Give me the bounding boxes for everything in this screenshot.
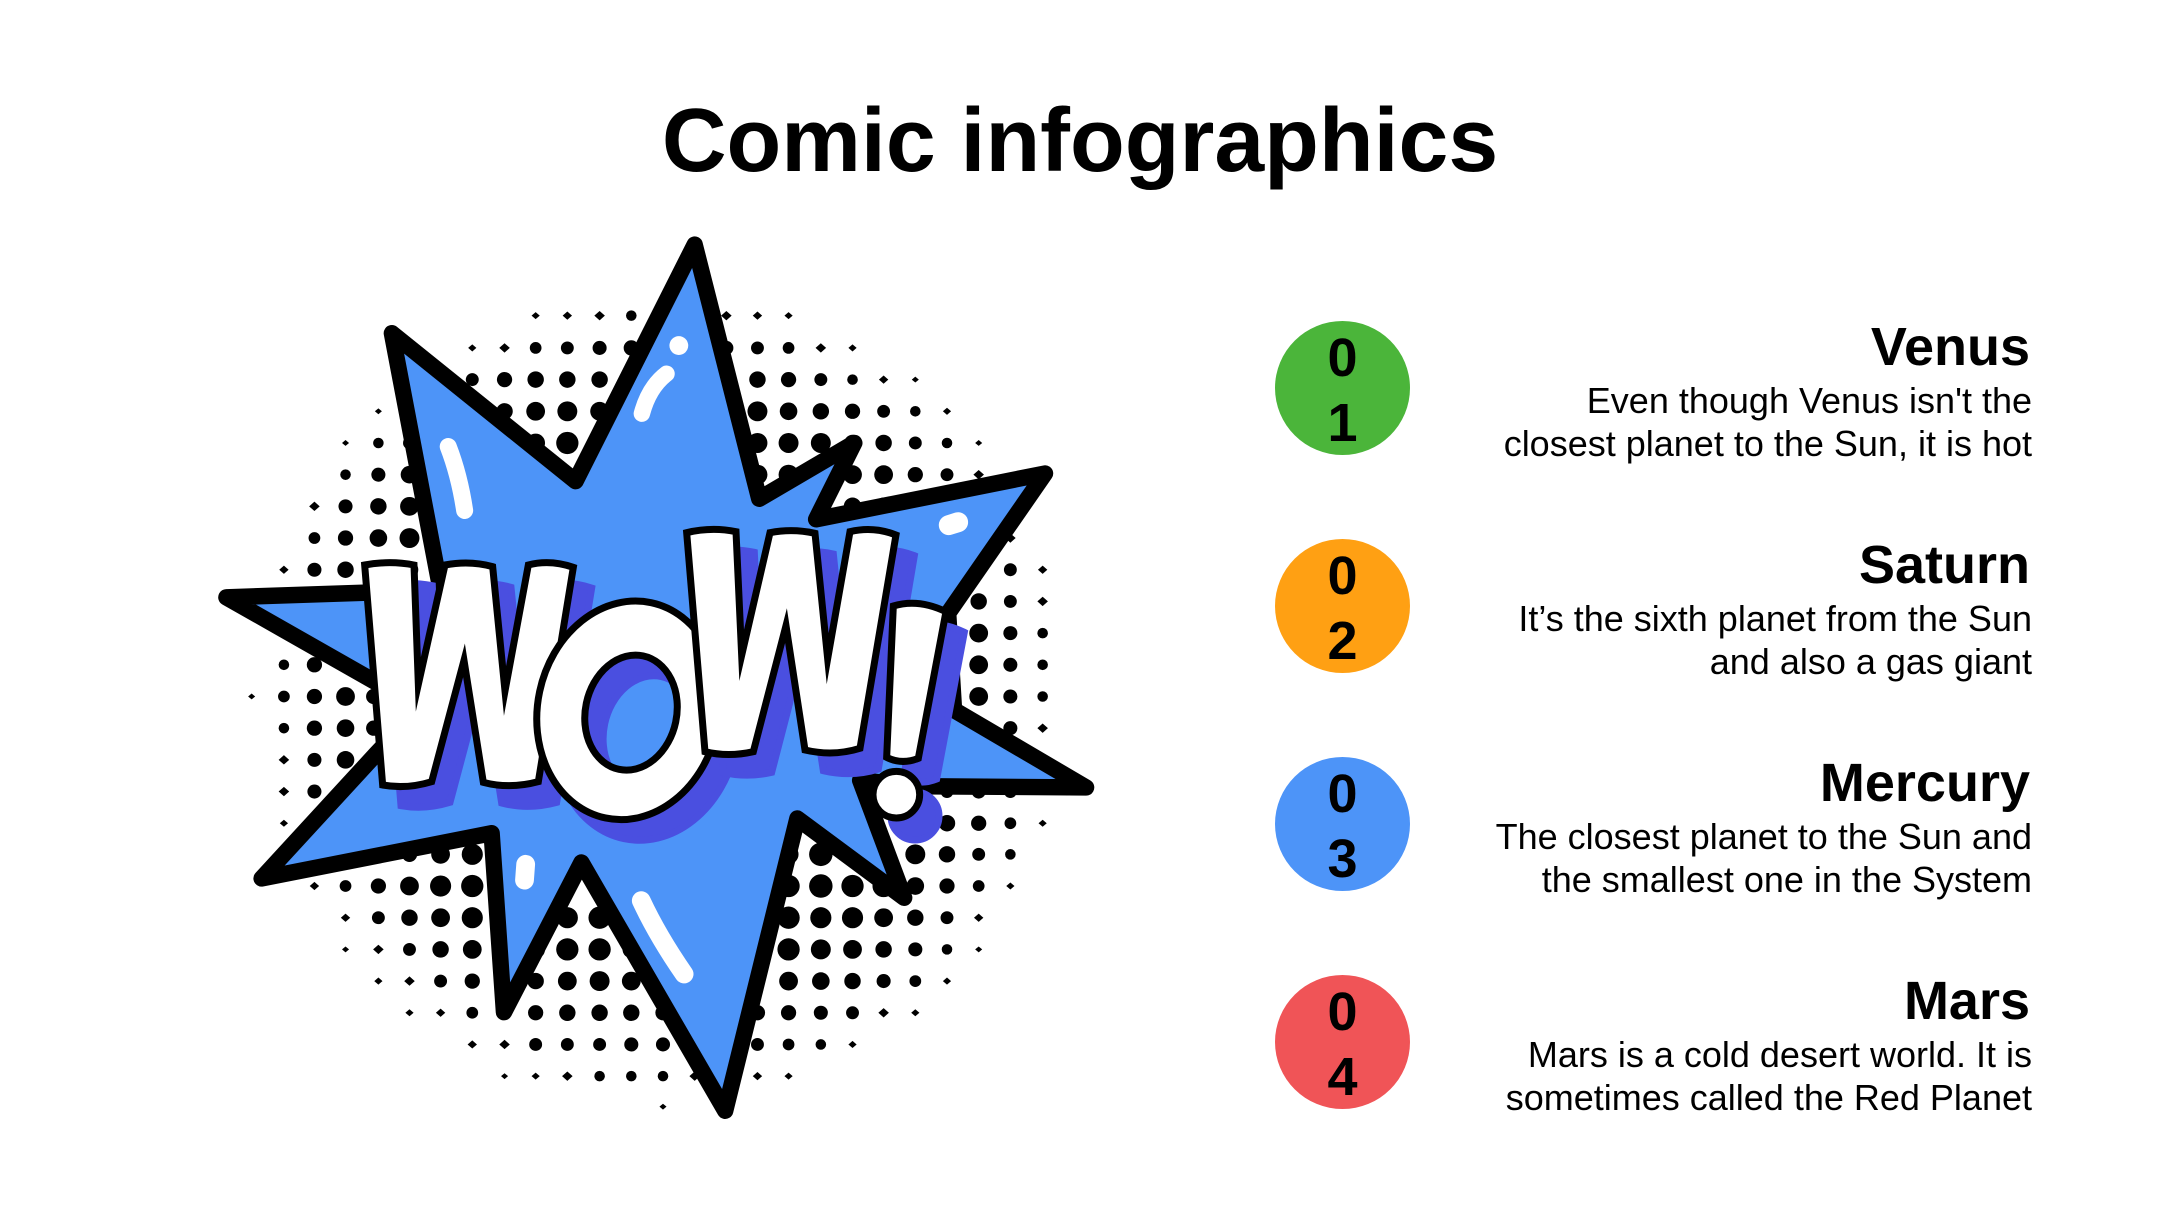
- item 01 text: Venus: Even though Venus isn't the: [1587, 380, 2032, 421]
- item 03 text: Mercury: Mercury: [1820, 753, 2030, 813]
- item 02 text: Saturn: [1518, 535, 2032, 682]
- item 01 number circle: 1: [1327, 393, 1358, 453]
- WOW! letters: [365, 529, 946, 837]
- item 04 text: Mars: Mars is a cold desert world. It is: [1528, 1034, 2032, 1075]
- WOW! lettering with shadow: [365, 529, 964, 857]
- item 01 text: Venus: Venus: [1871, 317, 2030, 377]
- item 02 text: Saturn: Saturn: [1859, 535, 2030, 595]
- item 01 text: Venus: closest planet to the Sun, it is hot: [1504, 423, 2032, 464]
- burst background and star: [226, 245, 1086, 1111]
- item 04 text: Mars: sometimes called the Red Planet: [1506, 1077, 2032, 1118]
- title: Comic infographics: [662, 90, 1498, 190]
- item 02 number circle: 0: [1327, 546, 1358, 606]
- item 02 text: Saturn: and also a gas giant: [1710, 641, 2032, 682]
- item 03 number circle: 3: [1327, 828, 1358, 888]
- item 02 text: Saturn: It’s the sixth planet from the Sun: [1518, 598, 2032, 639]
- item 03 number circle: [1275, 756, 1410, 890]
- item 03 text: Mercury: The closest planet to the Sun and: [1496, 816, 2032, 857]
- item 04 text: Mars: [1506, 971, 2032, 1118]
- item 03 text: Mercury: [1496, 753, 2032, 900]
- item 02 number circle: [1275, 538, 1410, 672]
- blue starburst: [226, 245, 1086, 1111]
- item 02 number circle: 2: [1327, 610, 1358, 670]
- highlights: [448, 336, 958, 974]
- item 04 text: Mars: Mars: [1904, 971, 2030, 1031]
- item 01 number circle: 0: [1327, 328, 1358, 388]
- item 04 number circle: 4: [1327, 1046, 1358, 1106]
- item 04 number circle: [1275, 974, 1410, 1108]
- lettering shadow: [383, 550, 964, 857]
- item 03 number circle: 0: [1327, 764, 1358, 824]
- item 03 text: Mercury: the smallest one in the System: [1542, 859, 2032, 900]
- item 04 number circle: 0: [1327, 982, 1358, 1042]
- halftone dot background: [248, 310, 1048, 1110]
- item 01 text: Venus: [1504, 317, 2032, 464]
- item 01 number circle: [1275, 321, 1410, 455]
